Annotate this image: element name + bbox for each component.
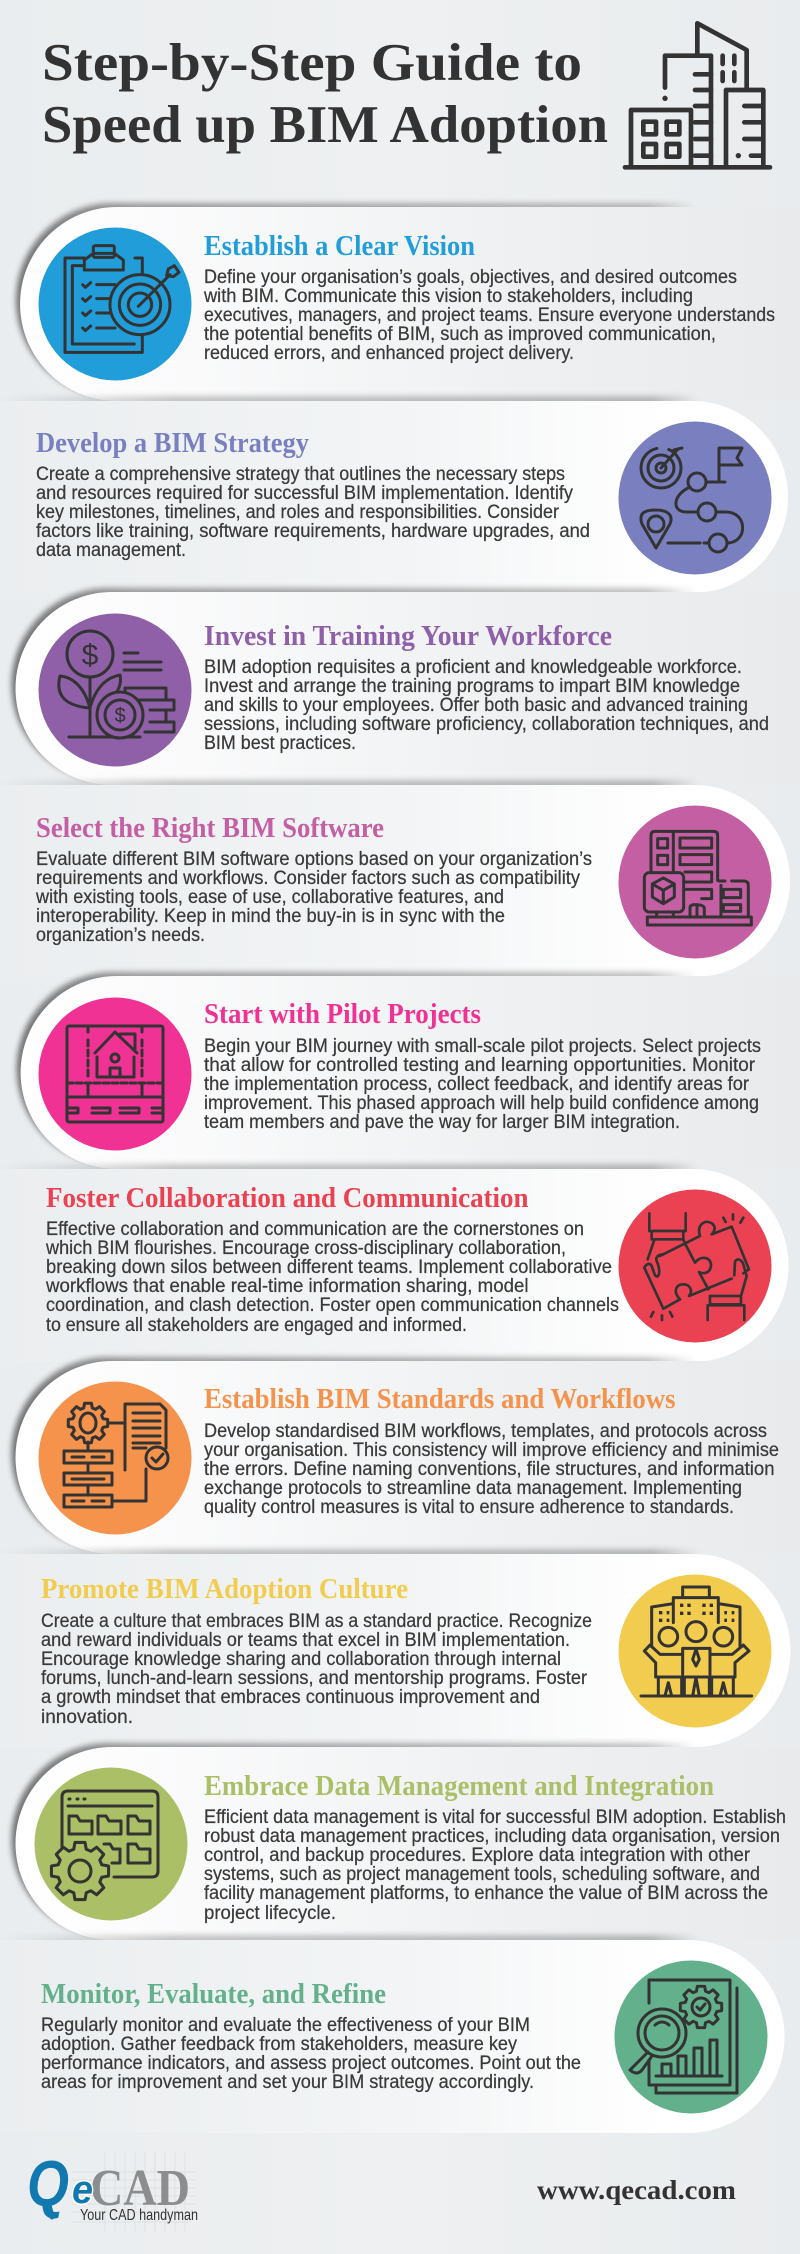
icon: report with magnifier and gear [630,1980,737,2093]
body text: quality control measures is vital to ensure adherence to standards. [204,1496,734,1518]
body text: key milestones, timelines, and roles and responsibilities. Consider [36,501,559,523]
body text [203,266,775,364]
body text: team members and pave the way for larger BIM integration. [204,1111,680,1133]
icon: clipboard and target [65,246,179,352]
heading: Develop a BIM Strategy [36,428,309,459]
body text [204,1035,761,1133]
body text: reduced errors, and enhanced project delivery. [204,342,574,364]
body text [36,463,590,561]
body text: and resources required for successful BIM implementation. Identify [36,482,573,504]
icon badge: BIM building [618,806,772,958]
body text: Define your organisation’s goals, objectives, and desired outcomes [204,266,737,288]
panel: start with pilot projects [17,972,800,1169]
body text: and reward individuals or teams that excel in BIM implementation. [41,1629,570,1651]
panel background [16,1747,800,1940]
icon: team in front of buildings [641,1587,752,1696]
body text: Invest and arrange the training programs to impart BIM knowledge [204,675,740,697]
icon badge: roadmap [618,422,772,574]
body text: to ensure all stakeholders are engaged and informed. [46,1314,467,1336]
body text: with BIM. Communicate this vision to stakeholders, including [203,285,693,307]
panel: monitor, evaluate, and refine [0,1935,784,2133]
body text: factors like training, software requirements, hardware upgrades, and [36,520,590,542]
body text [41,2014,581,2093]
icon: roadmap with target, flag and pin [641,448,743,552]
heading: Select the Right BIM Software [36,813,384,844]
body text: interoperability. Keep in mind the buy-in is in sync with the [36,905,505,927]
body text: systems, such as project management tools, scheduling software, and [204,1863,760,1885]
panel: embrace data management and integration [12,1743,800,1940]
body text: Encourage knowledge sharing and collaboration through internal [41,1648,561,1670]
body text: Evaluate different BIM software options based on your organization’s [36,848,592,870]
body text: that allow for controlled testing and learning opportunities. Monitor [204,1054,755,1076]
body text: facility management platforms, to enhance the value of BIM across the [204,1882,768,1904]
panel background [0,1554,790,1747]
body text [204,1806,786,1924]
panel background [16,592,800,785]
body text: the potential benefits of BIM, such as improved communication, [204,323,716,345]
body text: organization’s needs. [36,924,205,946]
panel background [0,401,788,593]
icon: gear, document and flowchart [64,1403,168,1507]
logo: QeCAD: e [72,2168,93,2212]
logo: QeCAD: Q [27,2147,69,2220]
panel background [0,785,790,977]
body text [204,1420,779,1518]
body text: with existing tools, ease of use, collaborative features, and [35,886,504,908]
panel background [21,976,800,1169]
body text: workflows that enable real-time information sharing, model [45,1275,528,1297]
panel: promote BIM adoption culture [0,1549,790,1747]
body text: project lifecycle. [204,1902,336,1924]
logo: QeCAD: Your CAD handyman [80,2207,198,2224]
icon: building with 3D cube [644,831,751,925]
body text: the errors. Define naming conventions, file structures, and information [204,1458,774,1480]
icon: house site plan [67,1026,163,1122]
icon: money plant and coins: $ [82,639,99,672]
body text: BIM adoption requisites a proficient and knowledgeable workforce. [204,656,742,678]
icon: hands joining puzzle pieces [644,1213,749,1320]
body text: improvement. This phased approach will help build confidence among [204,1092,759,1114]
body text: control, and backup procedures. Explore data integration with other [204,1844,750,1866]
body text: areas for improvement and set your BIM strategy accordingly. [41,2071,534,2093]
panel background [0,1940,784,2133]
body text: exchange protocols to streamline data management. Implementing [204,1477,742,1499]
panel: establish BIM standards and workflows [12,1357,800,1554]
icon: folders window and gear [51,1791,158,1900]
heading: Establish BIM Standards and Workflows [204,1384,676,1415]
body text: forums, lunch-and-learn sessions, and mentorship programs. Foster [41,1667,587,1689]
icon: money plant and coins [59,631,174,738]
body text: data management. [36,539,186,561]
panel: invest in training your workforce [12,588,800,785]
panel: establish a clear vision [16,203,800,401]
panel background [0,1169,788,1362]
icon badge: puzzle [618,1190,772,1342]
body text: innovation. [41,1706,133,1728]
logo: QeCAD: CAD [90,2160,190,2217]
panel: foster collaboration and communication [0,1164,788,1362]
heading: Promote BIM Adoption Culture [41,1574,408,1605]
body text: performance indicators, and assess project outcomes. Point out the [41,2052,581,2074]
icon: city buildings [625,23,770,167]
body text: Regularly monitor and evaluate the effectiveness of your BIM [41,2014,530,2036]
icon badge: data management [34,1768,188,1920]
body text: requirements and workflows. Consider factors such as compatibility [36,867,580,889]
title: Step-by-Step Guide to [42,34,582,92]
panel: develop a BIM strategy [0,396,788,593]
body text: Create a comprehensive strategy that outlines the necessary steps [36,463,565,485]
body text: Develop standardised BIM workflows, templates, and protocols across [204,1420,767,1442]
body text [204,656,769,754]
body text: Effective collaboration and communication are the cornerstones on [46,1218,584,1240]
body text: the implementation process, collect feedback, and identify areas for [204,1073,749,1095]
body text: a growth mindset that embraces continuous improvement and [41,1686,540,1708]
icon badge: team culture [618,1574,772,1728]
body text: BIM best practices. [204,732,356,754]
logo: QeCAD [27,2147,198,2232]
icon badge: evaluation [614,1960,768,2114]
heading: Foster Collaboration and Communication [46,1183,529,1214]
heading: Embrace Data Management and Integration [204,1771,714,1802]
panel: select the right BIM software [0,780,790,977]
body text: which BIM flourishes. Encourage cross-disciplinary collaboration, [45,1237,566,1259]
body text: coordination, and clash detection. Foster open communication channels [46,1294,619,1316]
heading: Monitor, Evaluate, and Refine [41,1979,386,2010]
panel background [20,207,800,401]
panel background [16,1361,800,1554]
icon badge: workflow [38,1382,192,1534]
icon: money plant and coins: $ [114,705,126,727]
body text: sessions, including software proficiency, collaboration techniques, and [204,713,769,735]
icon badge: target on clipboard [38,228,192,380]
heading: Establish a Clear Vision [204,231,475,262]
body text: Begin your BIM journey with small-scale pilot projects. Select projects [204,1035,761,1057]
body text: Create a culture that embraces BIM as a standard practice. Recognize [41,1610,592,1632]
body text [35,848,592,946]
heading: Invest in Training Your Workforce [204,621,612,652]
body text [41,1610,592,1728]
body text: adoption. Gather feedback from stakeholders, measure key [41,2033,517,2055]
title: Speed up BIM Adoption [42,96,608,154]
title [42,34,608,154]
body text [45,1218,619,1336]
body text: and skills to your employees. Offer both basic and advanced training [204,694,748,716]
icon badge: money plant [38,614,192,766]
website url: www.qecad.com [537,2175,737,2205]
heading: Start with Pilot Projects [204,999,481,1030]
icon badge: site plan [38,998,192,1150]
body text: breaking down silos between different teams. Implement collaborative [46,1256,612,1278]
